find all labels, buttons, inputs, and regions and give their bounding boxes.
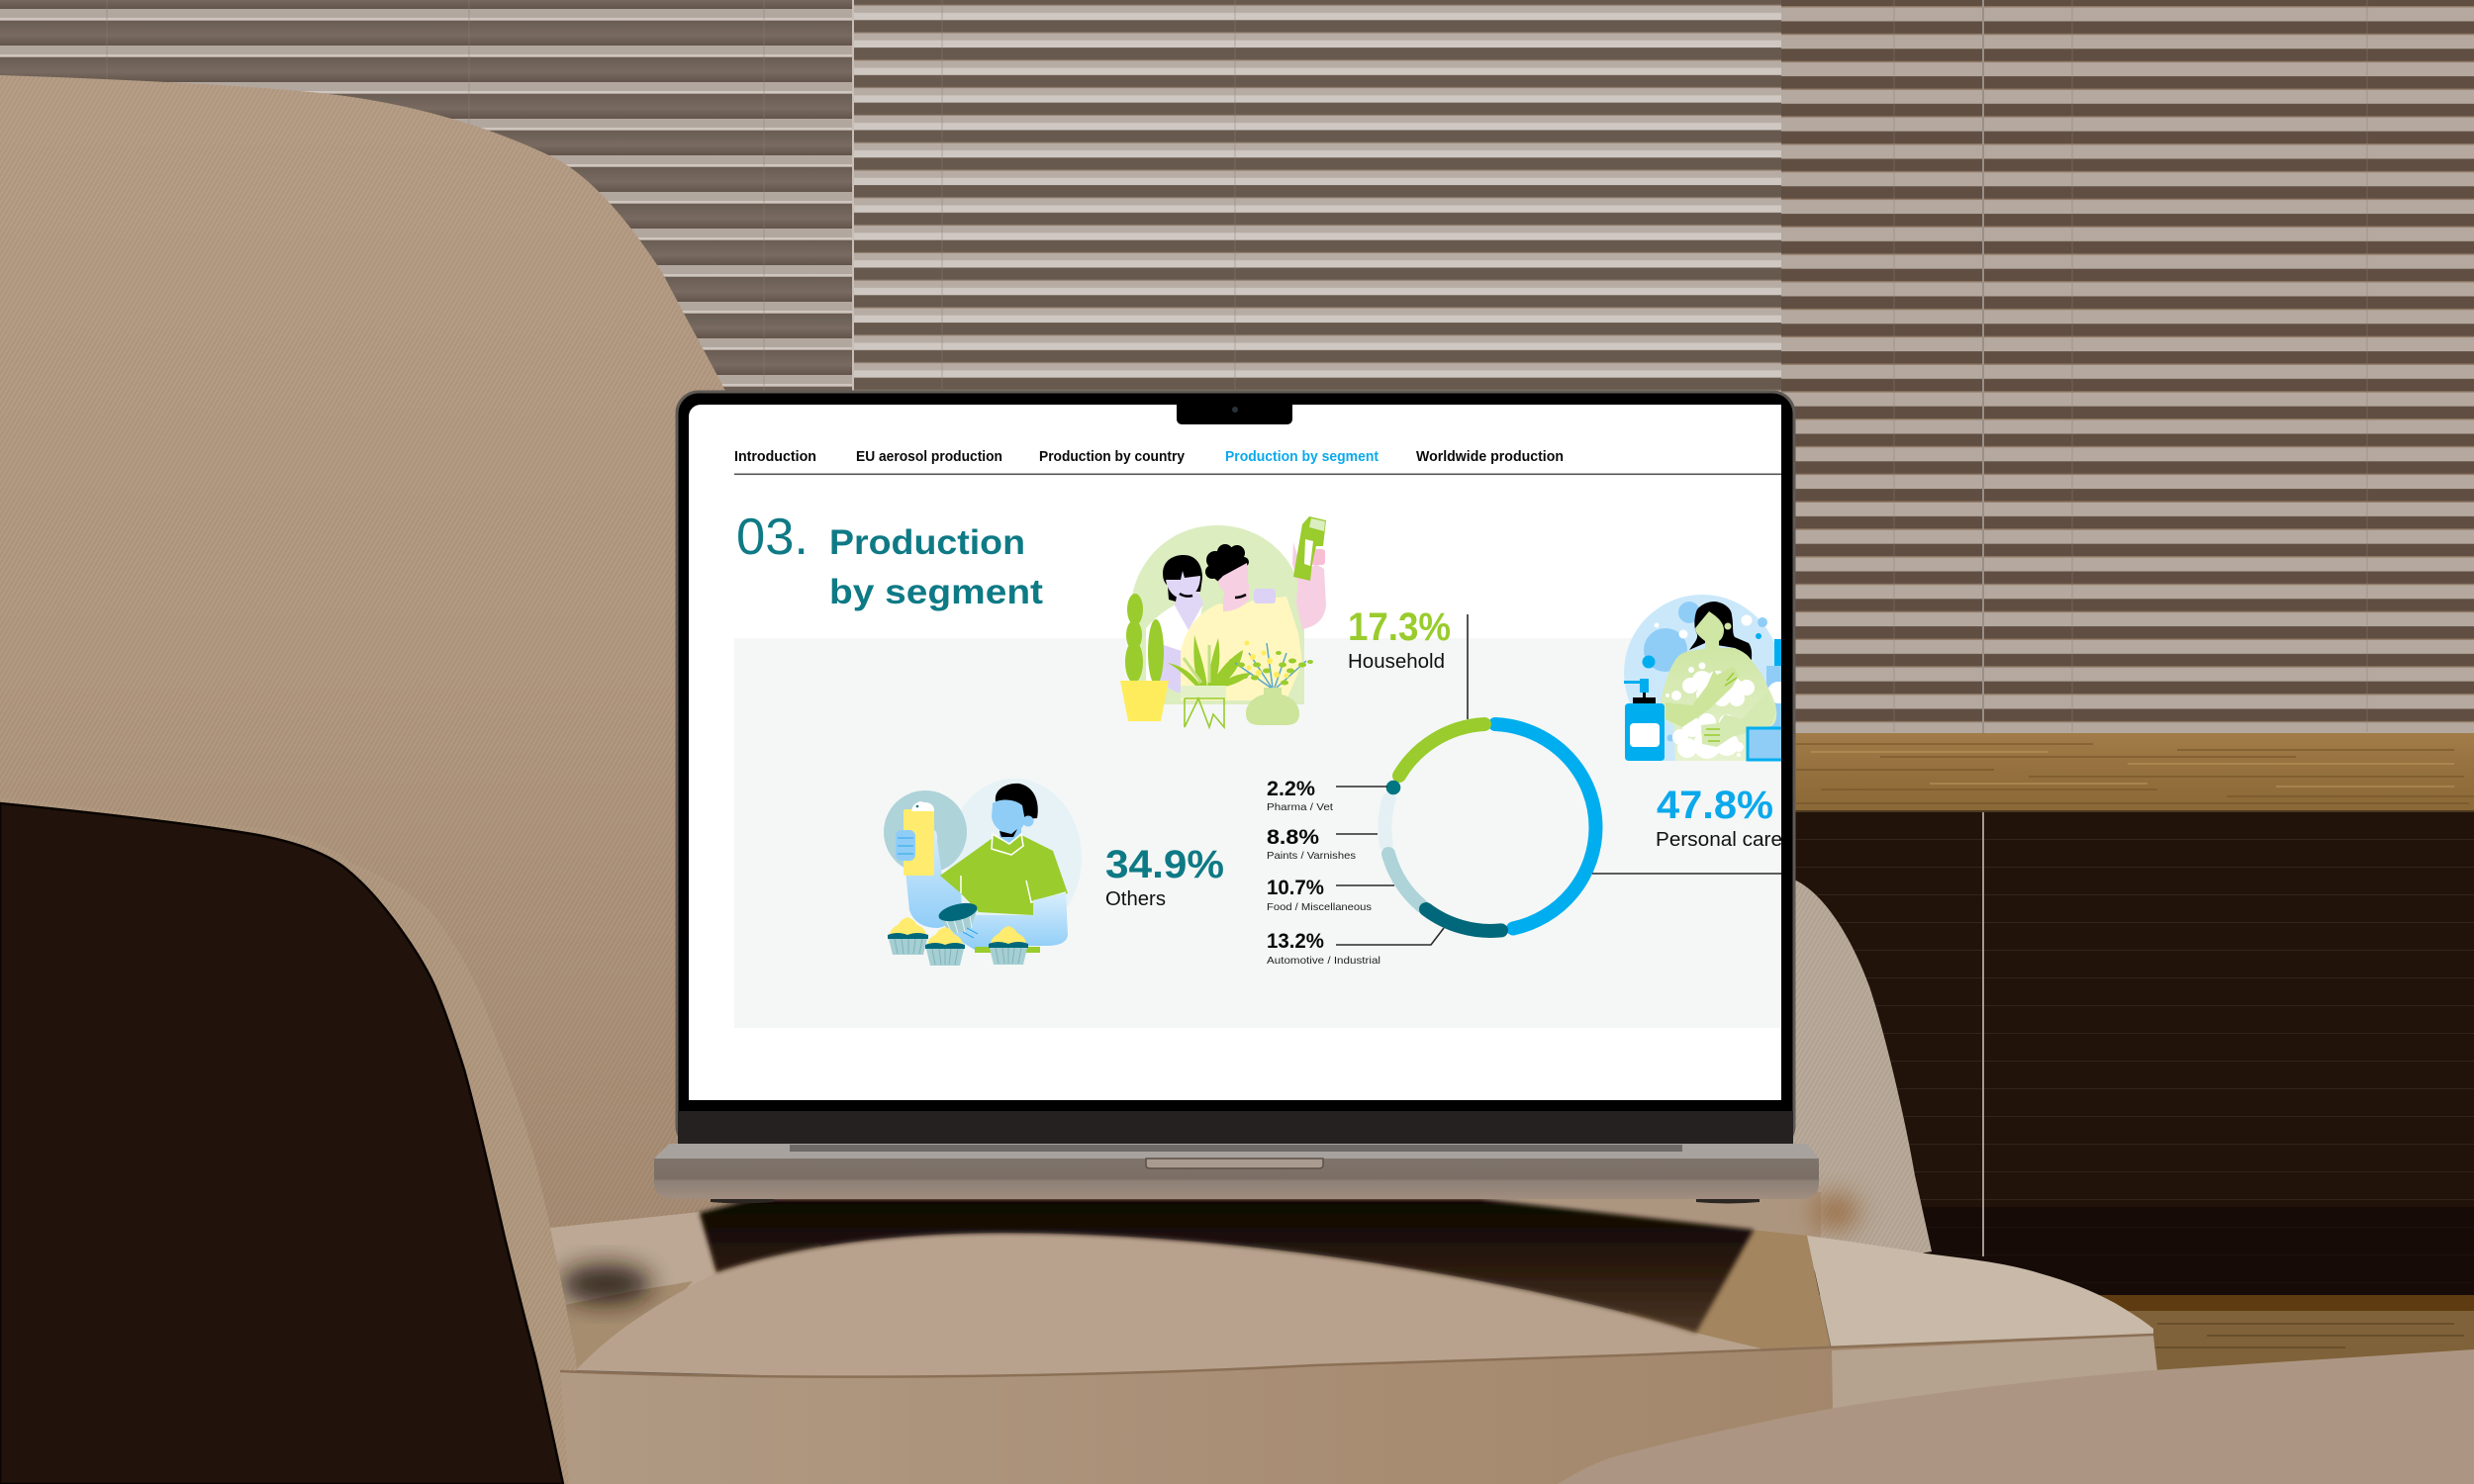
section title: Production <box>829 523 1025 562</box>
label: automotive / industrial <box>1267 934 1380 964</box>
label: food / miscellaneous: Food / Miscellaneous <box>1267 901 1372 913</box>
section number: 03. <box>736 509 809 566</box>
label: paints / varnishes <box>1267 829 1356 859</box>
illustration: personal care <box>1624 595 1789 761</box>
stat: personal care 47.8%: 47.8% <box>1657 784 1773 827</box>
keyboard strip <box>790 1145 1682 1152</box>
dark lower blinds <box>1781 812 2474 1295</box>
stat: personal care 47.8%: Personal care <box>1656 829 1782 851</box>
laptop lid <box>677 392 1794 1148</box>
leader lines <box>1336 614 1783 945</box>
label: pharma / vet: Pharma / Vet <box>1267 801 1333 813</box>
foreground cushion <box>1558 1349 2474 1484</box>
wooden sill upper <box>1781 733 2474 813</box>
cupcake middle <box>925 927 965 966</box>
laptop deck <box>654 1144 1819 1159</box>
stat: others 34.9%: Others <box>1105 888 1166 910</box>
label: automotive / industrial: Automotive / Industrial <box>1267 955 1380 967</box>
illustration: others <box>884 779 1082 966</box>
laptop shadow on seat <box>700 1199 1754 1333</box>
left chair tan band <box>0 797 584 1484</box>
sofa back, left large panel <box>0 75 1859 1276</box>
navigation bar: EU aerosol production <box>856 449 1002 465</box>
seat cushion front <box>560 1335 2157 1484</box>
laptop feet <box>711 1199 1760 1203</box>
right armrest of sofa <box>1761 871 1932 1276</box>
cupcake right <box>989 926 1028 965</box>
background: window blinds <box>0 0 2474 737</box>
laptop hinge <box>678 1111 1793 1145</box>
seat cushion top, lit <box>576 1230 2153 1379</box>
navigation bar <box>734 449 1783 475</box>
label: paints / varnishes: Paints / Varnishes <box>1267 850 1356 862</box>
label: paints / varnishes: 8.8% <box>1267 826 1319 849</box>
webcam notch <box>1177 405 1292 424</box>
seat cushion rear strip <box>550 1212 716 1370</box>
wooden sill lower <box>1930 1295 2474 1370</box>
navigation bar: Introduction <box>734 449 816 465</box>
laptop <box>654 392 1819 1203</box>
navigation bar: Worldwide production <box>1416 449 1564 465</box>
label: pharma / vet: 2.2% <box>1267 778 1315 800</box>
navigation bar: Production by segment <box>1225 449 1379 465</box>
stat: others 34.9% <box>1106 850 1223 905</box>
cupcake left <box>888 917 928 955</box>
laptop base front <box>654 1159 1819 1199</box>
stat: household 17.3% <box>1350 612 1450 668</box>
section title <box>829 523 1043 611</box>
stat: personal care 47.8% <box>1657 790 1781 846</box>
label: food / miscellaneous <box>1267 881 1372 910</box>
navigation bar: Production by country <box>1039 449 1185 465</box>
trackpad notch <box>1146 1159 1323 1168</box>
data panel <box>734 638 1783 1028</box>
section title: by segment <box>829 573 1043 611</box>
stat: household 17.3%: Household <box>1348 651 1445 673</box>
illustration: household <box>1120 516 1326 727</box>
stat: household 17.3%: 17.3% <box>1348 605 1451 649</box>
label: pharma / vet <box>1267 782 1333 810</box>
donut chart <box>1384 724 1596 931</box>
label: food / miscellaneous: 10.7% <box>1267 877 1324 899</box>
screen <box>689 405 1789 1100</box>
label: automotive / industrial: 13.2% <box>1267 930 1324 953</box>
stat: others 34.9%: 34.9% <box>1105 843 1224 886</box>
left chair leather panel <box>0 803 563 1484</box>
